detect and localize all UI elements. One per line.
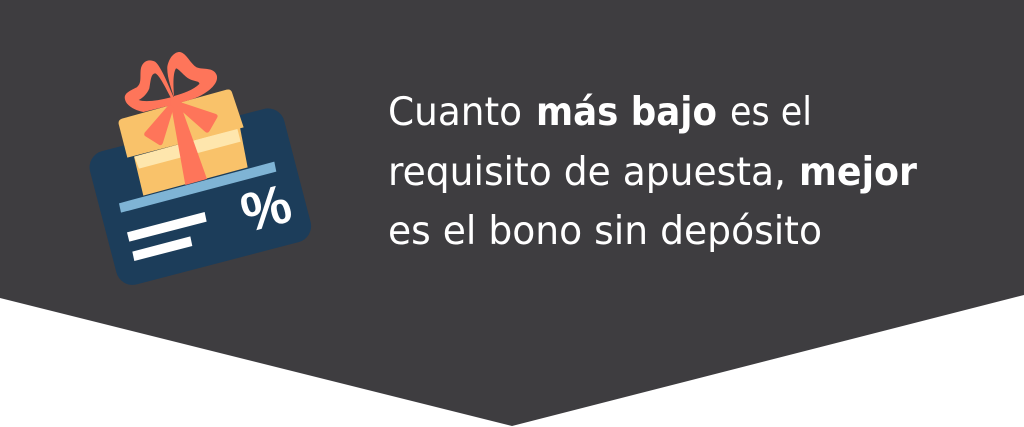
icon: gift on credit card [86, 52, 315, 289]
card blue stripe [119, 162, 276, 213]
card text line 2 [132, 236, 192, 261]
ribbon bow [125, 52, 217, 112]
card text line 1 [127, 212, 207, 242]
gift cream stripe [134, 129, 241, 169]
gift box body [134, 127, 248, 196]
ribbon tails [144, 102, 218, 145]
line 1: es el [730, 90, 812, 135]
line 1: Cuanto [388, 90, 522, 135]
ribbon vertical [171, 103, 207, 185]
card body [86, 105, 315, 289]
line 2: requisito de apuesta, [388, 150, 786, 195]
percent sign: % [234, 172, 298, 244]
ribbon knot [170, 97, 181, 107]
line 2: mejor [799, 150, 918, 195]
text block [388, 90, 918, 254]
gift lid [119, 89, 244, 158]
line 1: más bajo [536, 90, 717, 135]
line 3: es el bono sin depósito [388, 209, 822, 254]
